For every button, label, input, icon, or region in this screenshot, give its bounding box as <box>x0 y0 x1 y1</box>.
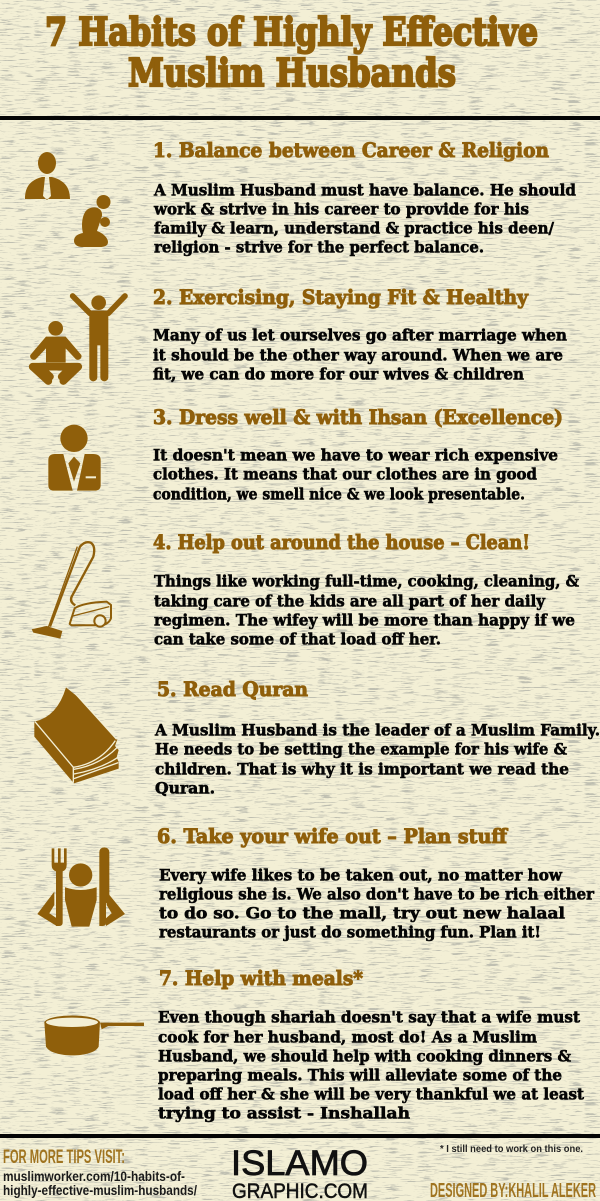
text: habit 6 <box>159 866 595 942</box>
heading: habit 7: 7. Help with meals* <box>159 966 363 990</box>
footer: more tips <box>3 1147 197 1198</box>
heading: habit 4: 4. Help out around the house – Clean! <box>153 530 530 554</box>
panel: habit 7 <box>44 966 585 1122</box>
heading: habit 5: 5. Read Quran <box>157 677 308 701</box>
text: habit 4: taking care of the kids are all part of her daily <box>154 592 546 610</box>
text: habit 2: Many of us let ourselves go after marriage when <box>153 326 567 344</box>
title <box>45 9 538 95</box>
text: habit 7: Husband, we should help with cooking dinners & <box>158 1046 572 1066</box>
text: habit 4: regimen. The wifey will be more than happy if we <box>154 610 575 630</box>
text: habit 7 <box>158 1008 585 1122</box>
text: habit 7: Even though shariah doesn't say that a wife must <box>158 1008 581 1026</box>
icon: Quran book <box>34 687 119 783</box>
text: habit 6: restaurants or just do something fun. Plan it! <box>159 922 541 942</box>
icon: exercising figures <box>30 295 125 381</box>
text: habit 5: children. That is why it is important we read the <box>155 760 569 778</box>
icon: man in suit <box>48 425 101 491</box>
icon: cooking pot <box>44 1015 144 1055</box>
text: habit 6: Every wife likes to be taken out, no matter how <box>159 866 563 884</box>
panel: habit 3 <box>48 405 563 504</box>
text: habit 3 <box>153 446 558 504</box>
footer: more tips: highly-effective-muslim-husbands/ <box>3 1183 197 1198</box>
text: habit 2: it should be the other way around. When we are <box>153 346 563 364</box>
text: habit 7: cook for her husband, most do! As a Muslim <box>158 1028 537 1046</box>
logo: Islamo Graphic <box>231 1144 368 1201</box>
icon: person with fork and knife <box>37 847 125 927</box>
heading: habit 2: 2. Exercising, Staying Fit & Healthy <box>153 285 529 309</box>
text: habit 1: religion - strive for the perfect balance. <box>154 238 484 256</box>
panel: habit 6 <box>37 824 595 942</box>
heading: habit 1: 1. Balance between Career & Religion <box>153 138 549 162</box>
heading: habit 3: 3. Dress well & with Ihsan (Excellence) <box>153 405 563 429</box>
text: habit 5: He needs to be setting the example for his wife & <box>155 740 568 758</box>
text: habit 3: clothes. It means that our clothes are in good <box>153 464 537 484</box>
text: habit 2: fit, we can do more for our wives & children <box>153 364 524 384</box>
panel: habit 2 <box>30 285 567 384</box>
text: habit 7: load off her & she will be very thankful we at least <box>158 1084 585 1104</box>
logo: Islamo Graphic: ISLAMO <box>231 1144 368 1183</box>
footer: more tips: FOR MORE TIPS VISIT: <box>3 1147 125 1168</box>
title: Muslim Husbands <box>128 50 456 95</box>
icon: businessman and praying man <box>25 152 110 247</box>
panel: habit 4 <box>32 530 580 648</box>
text: habit 5: Quran. <box>155 778 215 798</box>
text: habit 1: family & learn, understand & practice his deen/ <box>154 218 554 238</box>
text: habit 4: can take some of that load off her. <box>154 630 441 648</box>
text: habit 4: Things like working full-time, cooking, cleaning, & <box>154 572 580 590</box>
panel: habit 1 <box>25 138 576 256</box>
footer: more tips: muslimworker.com/10-habits-of- <box>3 1169 185 1184</box>
text: habit 1: A Muslim Husband must have balance. He should <box>153 180 576 200</box>
text: habit 5 <box>154 720 600 798</box>
text: habit 1: work & strive in his career to provide for his <box>153 200 529 218</box>
text: habit 2 <box>153 326 567 384</box>
text: habit 7: trying to assist - Inshallah <box>158 1104 410 1122</box>
text: habit 4 <box>154 572 580 648</box>
text: habit 7: preparing meals. This will alleviate some of the <box>158 1066 562 1084</box>
text: habit 3: It doesn't mean we have to wear rich expensive <box>153 446 558 464</box>
text: habit 3: condition, we smell nice & we look presentable. <box>153 484 525 504</box>
heading: habit 6: 6. Take your wife out – Plan stuff <box>157 824 509 848</box>
note: footnote: * I still need to work on this one. <box>440 1144 583 1155</box>
icon: vacuum cleaner <box>32 542 111 639</box>
panel: habit 5 <box>34 677 600 798</box>
text: habit 1 <box>153 180 576 256</box>
text: habit 6: to do so. Go to the mall, try out new halaal <box>159 904 565 922</box>
